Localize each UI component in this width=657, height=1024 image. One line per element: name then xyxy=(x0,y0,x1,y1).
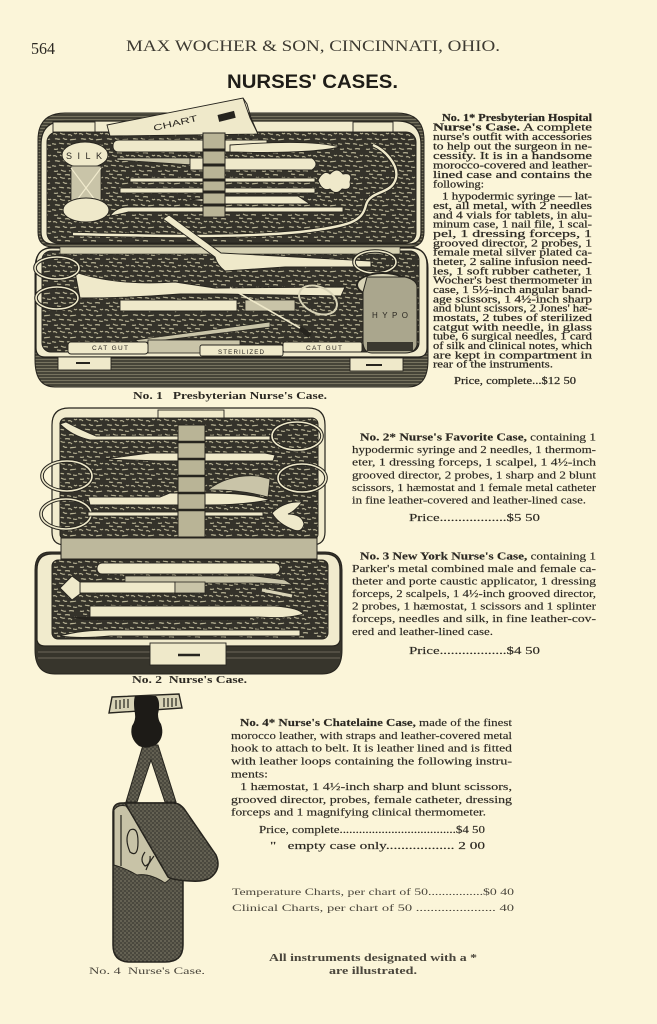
text: No. 1 description: Wocher's best thermometer in xyxy=(433,276,592,287)
running header: MAX WOCHER & SON, CINCINNATI, OHIO. xyxy=(126,38,500,55)
hypodermic box xyxy=(363,277,417,353)
silk spool xyxy=(62,142,109,222)
chart booklet: CHART xyxy=(152,113,198,133)
text: No. 2 description: eter, 1 dressing forceps, 1 scalpel, 1 4½-inch xyxy=(352,458,596,468)
hypodermic box: HYPO xyxy=(372,311,408,320)
illustration: No. 1 Presbyterian Nurse's Case xyxy=(35,98,428,387)
text: No. 1 description: female metal silver plated ca- xyxy=(433,248,592,259)
text: No. 1 description: following: xyxy=(433,180,484,190)
text: No. 1 description: est, all metal, with 2 needles xyxy=(433,201,592,212)
text: No. 1 description: to help out the surgeon in ne- xyxy=(433,142,592,152)
text: No. 1 description: Price, complete...$12 50 xyxy=(454,376,576,387)
footnote: All instruments designated with a * xyxy=(269,953,477,964)
belt hook xyxy=(109,694,182,713)
text: chart prices: Clinical Charts, per chart of 50 ...................... 40 xyxy=(232,903,514,914)
text: No. 2 description: Price..................$5 50 xyxy=(409,513,540,524)
base xyxy=(35,552,342,674)
case base xyxy=(35,247,428,387)
text: No. 1 description: Nurse's Case. A complete xyxy=(433,122,593,134)
text: No. 1 description: and 4 vials for tablets, in alu- xyxy=(433,210,592,221)
text: No. 1 description: tube, 6 surgical needles, 1 card xyxy=(433,332,592,343)
text: No. 1 description xyxy=(433,113,593,387)
footnote xyxy=(269,953,477,977)
text: No. 2 description: grooved director, 2 probes, 1 sharp and 2 blunt xyxy=(352,470,596,482)
text: No. 1 description: of silk and clinical notes, which xyxy=(433,341,592,352)
pouch xyxy=(113,803,183,962)
text: No. 4 description: 1 hæmostat, 1 4½-inch sharp and blunt scissors, xyxy=(240,782,512,793)
text: No. 1 description: lined case and contains the xyxy=(433,170,593,181)
text: No. 3 description: 2 probes, 1 hæmostat, 1 scissors and 1 splinter xyxy=(352,602,597,612)
text: No. 1 description: rear of the instruments. xyxy=(433,360,553,371)
base instruments xyxy=(60,563,303,638)
scissors and forceps xyxy=(35,215,409,343)
knob xyxy=(131,696,162,748)
straps xyxy=(126,745,176,802)
text: No. 4 description: " empty case only.................. 2 00 xyxy=(270,841,485,852)
caption: No. 2: No. 2 Nurse's Case. xyxy=(132,675,248,686)
catgut tubes: STERILIZED xyxy=(218,349,265,356)
text: No. 4 description xyxy=(231,718,513,852)
text: No. 1 description: minum case, 1 nail file, 1 scal- xyxy=(433,220,592,231)
illustration: No. 2 Nurse's Case xyxy=(35,408,342,674)
text: No. 1 description: are kept in compartment in xyxy=(433,350,592,361)
text: No. 4 description: hook to attach to belt. It is leather lined and is fitted xyxy=(231,744,512,754)
text: No. 4 description: No. 4* Nurse's Chatelaine Case, made of the finest xyxy=(240,718,512,729)
text: No. 1 description: mostats, 2 tubes of sterilized xyxy=(433,313,592,324)
title: NURSES' CASES. xyxy=(227,72,398,93)
text: chart prices: Temperature Charts, per chart of 50................$0 40 xyxy=(232,887,514,898)
clasp xyxy=(150,643,226,665)
chart booklet xyxy=(107,98,258,136)
text: No. 3 description xyxy=(352,552,597,657)
catgut tubes: CAT GUT xyxy=(306,345,342,352)
text: No. 1 description: and blunt scissors, 2 Jones' hæ- xyxy=(433,304,592,315)
text: No. 3 description: Parker's metal combined male and female ca- xyxy=(352,564,597,575)
text: No. 4 description: with leather loops containing the following instru- xyxy=(231,756,513,768)
text: No. 3 description: forceps, needles and silk, in fine leather-cov- xyxy=(352,614,597,625)
text: No. 4 description: grooved director, probes, female catheter, dressing xyxy=(231,795,512,806)
flap xyxy=(61,538,317,559)
case lid xyxy=(38,113,424,247)
text: No. 2 description: hypodermic syringe and 2 needles, 1 thermom- xyxy=(352,445,597,456)
text: No. 3 description: ered and leather-lined case. xyxy=(352,627,493,638)
text: No. 2 description: No. 2* Nurse's Favorite Case, containing 1 xyxy=(360,432,596,444)
text: No. 2 description: scissors, 1 hæmostat and 1 female metal catheter xyxy=(352,483,597,494)
text: No. 1 description: grooved director, 2 probes, 1 xyxy=(433,238,592,249)
text: No. 1 description: theter, 2 saline infusion need- xyxy=(433,257,592,268)
text: No. 1 description: age scissors, 1 4½-inch sharp xyxy=(433,294,592,305)
text: No. 2 description xyxy=(352,432,597,524)
text: No. 1 description: morocco-covered and leather- xyxy=(433,160,592,172)
flap xyxy=(125,803,218,881)
text: No. 1 description: nurse's outfit with accessories xyxy=(433,132,592,143)
silk spool: SILK xyxy=(66,151,102,161)
text: No. 4 description: Price, complete....................................$4 50 xyxy=(259,825,485,836)
illustration: No. 4 Nurse's Chatelaine Case xyxy=(109,694,218,962)
pouch open panel xyxy=(114,806,175,883)
text: chart prices xyxy=(232,887,514,914)
text: No. 4 description: ments: xyxy=(231,770,268,780)
text: No. 3 description: Price..................$4 50 xyxy=(409,646,540,657)
text: No. 1 description: 1 hypodermic syringe — lat- xyxy=(442,192,592,202)
text: No. 3 description: No. 3 New York Nurse's Case, containing 1 xyxy=(360,552,596,562)
caption: No. 4: No. 4 Nurse's Case. xyxy=(89,966,205,977)
lid instruments xyxy=(41,422,326,537)
footnote: are illustrated. xyxy=(329,966,418,977)
text: No. 1 description: catgut with needle, in glass xyxy=(433,322,592,333)
catgut tubes xyxy=(68,340,362,356)
text: No. 3 description: forceps, 2 scalpels, 1 4½-inch grooved director, xyxy=(352,589,596,600)
lid instruments xyxy=(73,133,396,236)
page number: 564 xyxy=(31,39,55,58)
lid xyxy=(52,408,325,545)
text: No. 4 description: morocco leather, with straps and leather-covered metal xyxy=(231,731,512,742)
text: No. 1 description: les, 1 soft rubber catheter, 1 xyxy=(433,266,592,277)
caption: No. 1: No. 1 Presbyterian Nurse's Case. xyxy=(133,391,327,402)
catgut tubes: CAT GUT xyxy=(92,345,128,352)
text: No. 2 description: in fine leather-covered and leather-lined case. xyxy=(352,496,586,506)
hinges xyxy=(53,122,393,132)
text: No. 4 description: forceps and 1 magnifying clinical thermometer. xyxy=(231,808,486,818)
clasps xyxy=(58,357,403,371)
text: No. 1 description: case, 1 5½-inch angular band- xyxy=(433,285,592,296)
text: No. 3 description: theter and porte caustic applicator, 1 dressing xyxy=(352,576,596,588)
text: No. 1 description: No. 1* Presbyterian Hospital xyxy=(442,113,592,124)
text: No. 1 description: cessity. It is in a handsome xyxy=(433,151,593,162)
text: No. 1 description: pel, 1 dressing forceps, 1 xyxy=(433,229,592,240)
